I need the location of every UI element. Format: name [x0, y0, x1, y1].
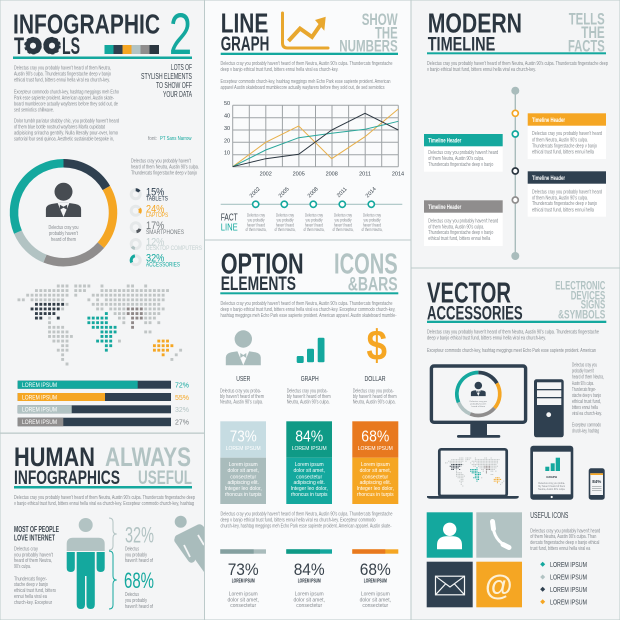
human intro text [14, 495, 195, 507]
useful icons text [530, 528, 600, 552]
card: 84%: dolor sit amet, [293, 468, 325, 474]
heading: modern timeline: TIMELINE [428, 35, 495, 56]
progress bars: 55% [175, 393, 189, 402]
card: 68%: consectetur [362, 474, 389, 480]
intro text: of them blue bottle nostrud wayfarers Marfa cupidatat [14, 124, 105, 130]
monitor side text: heard of them Neutra, [572, 375, 604, 381]
stat: 84% [286, 549, 332, 609]
stat list: TABLETS [146, 196, 168, 202]
fact line timeline: of them Neutra, [362, 227, 382, 232]
left human text: church-key. Excepteur [14, 600, 52, 606]
card: 68%: adipiscing elit. [360, 480, 391, 486]
fact line label [221, 212, 238, 234]
stat: 68%: Lorem ipsum [361, 591, 390, 597]
stat: 84%: Lorem ipsum [295, 591, 324, 597]
icon labels and text: Delectus cray you proba- [220, 388, 261, 394]
fact line timeline: you probably [364, 217, 381, 222]
icon labels and text: Delectus cray you proba- [287, 388, 328, 394]
stat list: LAPTOPS [146, 213, 168, 219]
icon labels and text: bly haven't heard of them [353, 394, 397, 400]
line graph text: Delectus cray you probably haven't heard of them Neutra, Austin 90's culpa. Thundercats fingerstache [220, 61, 393, 67]
heading: infographic tools: INFOGRAPHIC [13, 8, 160, 40]
icon: user [226, 330, 261, 365]
heading: option elements: &BARS [348, 274, 398, 296]
stat list: 15% [146, 186, 164, 198]
progress bars: LOREM IPSUM [22, 419, 57, 426]
heading: vector accessories: ACCESSORIES [427, 303, 523, 324]
useful icons text: Delectus cray you probably haven't heard [530, 528, 600, 534]
stat: 68%: 68% [360, 560, 391, 579]
progress bars: 72% [175, 380, 189, 390]
left human text: Thundercats finger- [14, 576, 47, 582]
card: 84% [286, 421, 332, 504]
donut side text: heard of them Neutra, Austin 90's culpa. [131, 164, 199, 170]
fact line timeline: of them Neutra, [304, 227, 324, 232]
stat: 73%: dolor sit amet, [227, 597, 259, 603]
heading: human infographics: USEFUL [138, 468, 192, 489]
fact line timeline: haven't heard [334, 222, 352, 227]
big number 2: 2 [169, 2, 192, 67]
icon: phone: 84% [592, 479, 601, 484]
panel: option elements [204, 240, 411, 620]
timeline card grey: Delectus cray you probably haven't heard [428, 218, 498, 224]
card: 84%: LOREM IPSUM [292, 446, 327, 452]
stat list [131, 186, 202, 268]
font credit: font: [148, 136, 157, 142]
stat list: SMARTPHONES [146, 230, 184, 236]
stat: 68% [352, 549, 398, 609]
stat: 84%: LOREM IPSUM [298, 579, 321, 585]
intro text: Austin 90's culpa. Thundercats fingerstache deep v banjo [14, 72, 111, 78]
left human text: ennui hella viral ea [14, 594, 47, 600]
monitor side text [572, 363, 604, 435]
fact line timeline: 2005 [278, 186, 291, 199]
donut chart: probably haven't [49, 231, 78, 237]
left human text: ethical trust fund, bitters [14, 588, 56, 594]
intro text: Excepteur commodo church-key, hashtag meggings meh Echo [14, 90, 119, 96]
timeline card orange [528, 113, 606, 159]
timeline card teal: Timeline Header [428, 138, 462, 145]
timeline card navy [528, 171, 606, 217]
intro text: sartorial four seal quinoa. Aesthetic sustainable bespoke in, [14, 136, 114, 142]
progress bars: LOREM IPSUM [22, 407, 57, 414]
tile: at sign [476, 562, 522, 607]
useful icons heading: USEFUL ICONS [530, 511, 568, 520]
card: 73%: Integer leo dolor, [225, 486, 262, 492]
fact line timeline: 2002 [249, 186, 262, 199]
option intro text: Delectus cray you probably haven't heard of them Neutra, Austin 90's culpa. Thundercats fingerstache [220, 301, 393, 307]
heading: human infographics: ALWAYS [105, 442, 191, 472]
option lower text [220, 512, 393, 530]
tile: phone [476, 512, 522, 558]
icon: graph bars [297, 338, 324, 363]
panel: human infographics [0, 433, 204, 620]
timeline card navy: Timeline Header [532, 175, 565, 182]
icon labels and text: Neutra, Austin 90's culpa. [287, 400, 330, 406]
icon labels and text: Neutra, Austin 90's culpa. [353, 400, 396, 406]
left human text: 90's culpa. [14, 564, 31, 570]
heading: vector accessories: VECTOR [427, 277, 511, 309]
tile: at sign: @ [485, 570, 512, 602]
option intro text: hashtag meggings meh Echo Park esse sapiente proident. American apparel. Austin skateboard mumble- [220, 313, 397, 319]
monitor side text: Thundercats finger- [572, 387, 596, 393]
fact line timeline: Delectus cray [247, 212, 265, 217]
stat list: DESKTOP COMPUTERS [146, 246, 202, 252]
card: 84%: Integer leo dolor, [291, 486, 328, 492]
stat list: 32% [146, 253, 164, 265]
heading: infographic tools: LS [62, 33, 80, 60]
useful icons list [540, 560, 587, 606]
tile: mail [427, 562, 473, 607]
card: 73%: dolor sit amet, [227, 468, 259, 474]
stat: 68%: Delectus [125, 592, 139, 598]
line chart: 30 [224, 126, 230, 132]
monitor side text: viral ea church-key. [572, 411, 602, 417]
stat: 32%: haven't heard of [125, 558, 153, 564]
intro text: sed semiotics chillwave. [14, 108, 54, 114]
useful icons text: trust fund, bitters ennui hella viral ea [530, 546, 590, 552]
card: 68%: rhoncus in turpis [357, 492, 394, 498]
icon: human figure [67, 518, 105, 609]
progress bars [18, 380, 189, 427]
fact line timeline [221, 186, 402, 232]
stat: 32% [125, 523, 154, 564]
bracket 68 [109, 551, 117, 609]
left human text [14, 546, 56, 606]
icon: tablet [530, 446, 573, 500]
progress bars: 27% [175, 418, 189, 427]
heading: human infographics: HUMAN [14, 442, 95, 472]
fact line timeline: Delectus cray [334, 212, 352, 217]
icon: desktop monitor: Delectus cray you [470, 400, 488, 403]
timeline card grey: of them Neutra, Austin 90's culpa. [428, 224, 484, 230]
vector intro text: deep v banjo ethical trust fund, bitters ennui hella viral ea church-key. [427, 336, 546, 342]
stat: 84%: 84% [294, 560, 325, 579]
card: 84%: 84% [295, 428, 323, 446]
icon: tablet: GRAPH [546, 475, 557, 479]
card: 84%: adipiscing elit. [293, 480, 325, 486]
donut chart [14, 163, 113, 262]
line chart: 2014 [392, 171, 404, 177]
card: 68% [352, 421, 398, 504]
heading: infographic tools: T [14, 33, 24, 60]
timeline card grey: Timeline Header [428, 204, 462, 211]
heading: modern timeline: THE [581, 23, 605, 42]
left human text: stache deep v banjo [14, 582, 48, 588]
monitor side text: stache deep v banjo [572, 393, 601, 399]
progress bars: LOREM IPSUM [22, 394, 57, 401]
fact line timeline: you probably [248, 217, 265, 222]
useful icons text: of them Neutra, Austin 90's culpa. Than [530, 534, 596, 540]
fact line timeline: haven't heard [363, 222, 381, 227]
intro text: ethical trust fund, bitters ennui hella viral ea church-key. [14, 78, 110, 84]
icon: computer tower [534, 379, 564, 437]
card: 73%: 73% [230, 428, 257, 446]
tagline: TO SHOW OFF [156, 81, 192, 90]
icon: tablet: Neutra, Austin 90's culpa. [538, 488, 566, 491]
line graph text: Excepteur commodo church-key, hashtag meggings meh Echo Park esse sapiente proident. American [220, 79, 391, 85]
option intro text: deep v banjo ethical trust fund, bitters ennui hella viral ea church-key. Excepteur commodo church-key, [220, 307, 396, 313]
stat: 32%: you probably [125, 552, 147, 558]
stat: 73% [220, 549, 266, 609]
card: 73%: adipiscing elit. [227, 480, 259, 486]
left human text: you probably haven't [14, 552, 54, 558]
fact line timeline: haven't heard [247, 222, 265, 227]
stat: 68%: you probably [125, 598, 147, 604]
heading: option elements: OPTION [221, 248, 304, 280]
intro text: Delectus cray you probably haven't heard of them Neutra, [14, 66, 111, 72]
icon: tablet: Delectus cray you proba- [538, 482, 565, 485]
fact line timeline: of them Neutra, [274, 227, 296, 232]
monitor side text: bitters ennui hella [572, 405, 598, 411]
heading: modern timeline: MODERN [428, 7, 522, 38]
icon: dollar: $ [366, 322, 387, 370]
heading: human infographics [14, 442, 192, 489]
card: 84%: rhoncus in turpis [291, 492, 328, 498]
stat: 32%: Delectus [125, 546, 139, 552]
stat list: 24% [146, 203, 164, 215]
monitor side text: probably haven't [572, 369, 594, 375]
fact line label: LINE [221, 222, 238, 234]
fact line timeline: haven't heard [305, 222, 323, 227]
vector intro text [427, 330, 599, 354]
fact line timeline: Delectus cray [363, 212, 381, 217]
donut side text: Delectus cray you probably haven't [131, 158, 191, 164]
fact line timeline: you probably [334, 217, 352, 222]
line chart: 10 [224, 151, 230, 157]
timeline card navy: Thundercats fingerstache deep v banjo [532, 201, 597, 207]
card: 68%: 68% [361, 428, 389, 446]
fact line timeline: 2014 [365, 186, 378, 199]
icon labels and text: GRAPH [301, 374, 319, 383]
line chart: 2008 [326, 171, 338, 177]
heading: infographic tools [13, 8, 160, 60]
line chart [224, 101, 404, 177]
useful icons list: LOREM IPSUM [550, 585, 587, 594]
donut side text [131, 158, 199, 176]
left human text: heard of them Neutra, [14, 558, 52, 564]
tagline: YOUR DATA [163, 90, 192, 99]
line graph text: apparel Austin skateboard mumblecore actually wayfarers before they sold out, de sed semiotics [220, 85, 385, 91]
stat: 68%: LOREM IPSUM [364, 579, 387, 585]
timeline intro text: v banjo ethical trust fund, bitters ennui hella viral ea church-key. [427, 67, 536, 73]
progress bars: 32% [175, 405, 189, 414]
intro text: board mumblecore actually wayfarers before they sold out, de [14, 102, 118, 108]
tagline: LOTS OF [171, 63, 192, 72]
timeline card teal: Thundercats fingerstache deep v banjo [428, 162, 493, 168]
line chart: 2011 [359, 171, 371, 177]
donut chart: heard of them [51, 237, 76, 243]
monitor side text: church-key, hashtag [572, 429, 599, 435]
monitor side text: Delectus cray you [572, 363, 597, 369]
stat: 73%: 73% [228, 560, 259, 579]
heading: line graph: NUMBERS [339, 37, 398, 56]
timeline card orange: ethical trust fund, bitters ennui hella [532, 150, 594, 156]
icon labels and text: USER [236, 374, 251, 383]
option intro text [220, 301, 397, 319]
timeline intro text [427, 61, 608, 73]
timeline card grey: ethical trust fund, bitters ennui hella [428, 236, 490, 242]
progress bars: LOREM IPSUM [22, 382, 57, 389]
option lower text: Delectus cray you probably haven't heard of them Neutra, Austin 90's culpa. Thundercats fingerstache [220, 512, 393, 518]
monitor side text: Excepteur commodo [572, 423, 601, 429]
timeline card orange: Timeline Header [532, 117, 565, 124]
icon labels and text: Delectus cray you proba- [353, 388, 394, 394]
fact line timeline: you probably [276, 217, 294, 222]
card: 73%: rhoncus in turpis [225, 492, 262, 498]
icon labels and text: bly haven't heard of them [287, 394, 331, 400]
card: 68%: LOREM IPSUM [358, 446, 393, 452]
bracket 32 [109, 518, 117, 550]
timeline card teal: Delectus cray you probably haven't heard [428, 150, 498, 156]
icon: phone [589, 468, 605, 500]
line chart: 2002 [260, 171, 272, 177]
line graph text [220, 61, 393, 91]
card: 68%: Lorem ipsum [361, 462, 390, 468]
card: 84%: consectetur [296, 474, 322, 480]
heading: option elements: ELEMENTS [221, 274, 296, 295]
fact line timeline: you probably [306, 217, 323, 222]
human intro text: Delectus cray you probably haven't heard of them Neutra, Austin 90's culpa. Thundercats fingerstache deep [14, 495, 195, 501]
stat list: ACCESSORIES [146, 262, 180, 268]
donut chart: Delectus cray you [48, 225, 79, 231]
stat: 32%: 32% [125, 523, 154, 548]
donut side text: Thundercats fingerstache deep v banjo [131, 170, 197, 176]
stat: 84%: dolor sit amet, [293, 597, 325, 603]
line graph text: deep v banjo ethical trust fund, bitters ennui hella viral ea church-key. [220, 67, 338, 73]
stat: 73%: consectetur [230, 603, 256, 609]
icon: desktop monitor: probably haven't [470, 402, 487, 406]
card: 68%: Integer leo dolor, [357, 486, 394, 492]
panel: line graph [204, 0, 411, 240]
icon labels and text: Neutra, Austin 90's culpa. [220, 400, 263, 406]
icon: leaning human figure [175, 516, 204, 572]
heading: line graph: GRAPH [221, 34, 269, 56]
icon: desktop monitor [431, 366, 526, 438]
card: 73% [220, 421, 266, 504]
card: 73%: LOREM IPSUM [226, 446, 261, 452]
useful icons text: dercats fingerstache deep v banjo ethical [530, 540, 599, 546]
icon labels and text [220, 374, 397, 406]
heading: line graph: THE [375, 24, 398, 42]
useful icons list: LOREM IPSUM [550, 560, 587, 569]
timeline card orange: Thundercats fingerstache deep v banjo [532, 144, 597, 150]
monitor side text: ethical trust fund, [572, 399, 601, 405]
timeline card navy: of them Neutra, Austin 90's culpa. [532, 195, 588, 201]
heading: option elements [221, 248, 398, 296]
heading: line graph: SHOW [362, 10, 398, 29]
line chart: 2005 [293, 171, 305, 177]
timeline card navy: ethical trust fund, bitters ennui hella [532, 207, 594, 213]
card: 73%: Lorem ipsum [229, 462, 258, 468]
option lower text: deep v banjo ethical trust fund, bitters ennui hella viral ea church-key. Excepteur commodo [220, 518, 376, 524]
icon: laptop [427, 449, 519, 499]
fact line timeline: Delectus cray [305, 212, 323, 217]
stat: 68% [124, 568, 154, 610]
tagline [141, 63, 192, 99]
heading: vector accessories: SIGNS [581, 298, 605, 312]
stat: 68%: dolor sit amet, [360, 597, 391, 603]
intro text: Dolor tumblr pariatur shabby chic, you probably haven't heard [14, 118, 119, 124]
timeline axis [511, 87, 519, 260]
timeline card grey: Thundercats fingerstache deep v banjo [428, 230, 493, 236]
line chart: 50 [224, 101, 230, 107]
panel: infographic tools [0, 0, 204, 433]
useful icons list: LOREM IPSUM [550, 573, 587, 582]
icon: desktop monitor: heard of them [472, 405, 485, 408]
card: 84%: Lorem ipsum [295, 462, 324, 468]
fact line timeline: Delectus cray [276, 212, 294, 217]
font credit: PT Sans Narrow [160, 136, 192, 142]
heading: vector accessories [427, 277, 606, 324]
heading: option elements: ICONS [334, 248, 398, 280]
stat: 68%: 68% [124, 568, 154, 593]
fact line label: FACT [221, 212, 238, 224]
line chart: 20 [224, 139, 230, 145]
stat: 68%: haven't heard of [125, 604, 153, 610]
line chart: 40 [224, 114, 230, 120]
fact line timeline: 2011 [336, 186, 349, 199]
heading: infographic tools: OO [24, 33, 60, 60]
intro text [14, 66, 119, 142]
panel: modern timeline [411, 0, 620, 268]
card: 73%: consectetur [230, 474, 256, 480]
intro text: adipisicing sriracha gentrify. Nulla literally pour-over, lomo [14, 130, 118, 136]
stat list: 12% [146, 236, 164, 248]
timeline card orange: of them Neutra, Austin 90's culpa. [532, 137, 588, 143]
fact line timeline: of them Neutra, [332, 227, 354, 232]
useful icons list: LOREM IPSUM [550, 597, 587, 606]
panel: vector accessories [411, 268, 620, 620]
monitor side text: Austin 90's culpa. [572, 381, 594, 387]
stat list: 17% [146, 220, 164, 232]
heading: human infographics: INFOGRAPHICS [14, 468, 120, 489]
subheading: most of people: MOST OF PEOPLE [14, 525, 59, 534]
heading: line graph: LINE [221, 7, 268, 38]
subheading: most of people [14, 525, 59, 542]
icon: rising chart [282, 13, 328, 48]
icon: tablet: bly haven't heard of them [538, 485, 565, 488]
fact line timeline: of them Neutra, [246, 227, 266, 232]
stat: 73%: LOREM IPSUM [232, 579, 255, 585]
left human text: Delectus cray [14, 546, 38, 552]
stat: 68%: consectetur [362, 603, 389, 609]
timeline card teal: of them Neutra, Austin 90's culpa. [428, 156, 484, 162]
colour strip [104, 45, 159, 54]
subheading: most of people: LOVE INTERNET [14, 534, 55, 542]
option lower text: church-key, hashtag meggings meh Echo Park esse sapiente proident. American apparel. Austin skate- [220, 524, 392, 530]
icon: person [46, 183, 81, 217]
font credit [148, 136, 192, 142]
tagline: STYLISH ELEMENTS [141, 72, 192, 81]
fact line timeline: haven't heard [276, 222, 294, 227]
heading: modern timeline [428, 7, 605, 56]
tile: user [427, 512, 473, 558]
timeline card teal [424, 134, 503, 172]
human intro text: v banjo ethical trust fund, bitters ennui hella viral ea church-key. Excepteur commodo church-key, hashtag [14, 501, 194, 507]
card: 68%: dolor sit amet, [360, 468, 391, 474]
timeline card grey [424, 200, 503, 246]
stat: 73%: Lorem ipsum [229, 591, 258, 597]
icon labels and text: bly haven't heard of them [220, 394, 264, 400]
fact line timeline: 2008 [307, 186, 320, 199]
stat: 84%: consectetur [296, 603, 322, 609]
dotted world map [18, 286, 182, 364]
heading: line graph [221, 7, 398, 56]
intro text: Park esse sapiente proident. American apparel. Austin skate- [14, 96, 114, 102]
icon labels and text: DOLLAR [364, 374, 386, 383]
